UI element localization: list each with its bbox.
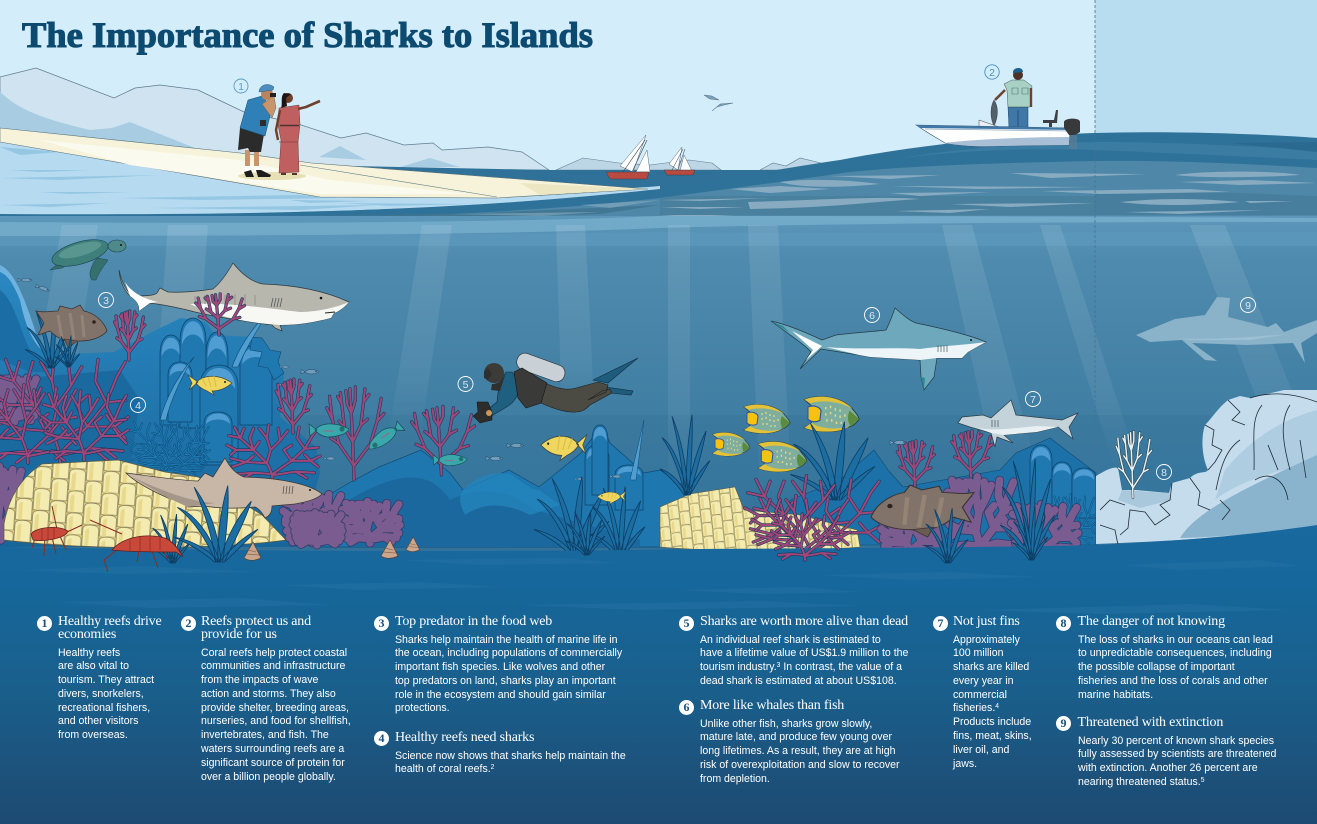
panel: item 3 text — [374, 614, 622, 714]
ghost shark silhouette — [1136, 297, 1317, 363]
body 3: important fish species. Like wolves and other — [395, 661, 605, 673]
purple coral far left — [0, 376, 37, 540]
number label 8: 8 — [1161, 467, 1167, 479]
sailboat one — [606, 135, 650, 179]
badge 7: 7 — [938, 616, 944, 630]
body 9: with extinction. Another 26 percent are — [1078, 762, 1257, 774]
body 5: dead shark is estimated at about US$108. — [700, 675, 897, 687]
heading 7: Not just fins — [953, 614, 1020, 628]
heading 1: Healthy reefs drive — [58, 614, 161, 628]
number label 3: 3 — [103, 295, 109, 307]
heading 5: Sharks are worth more alive than dead — [700, 614, 908, 628]
blue tube coral centre — [585, 425, 643, 510]
panel: item 1 text — [37, 614, 162, 741]
badge 2: 2 — [186, 616, 192, 630]
body 6: long lifetimes. As a result, they are at high — [700, 745, 895, 757]
number label 9: 9 — [1245, 300, 1251, 312]
fisherman on boat — [916, 68, 1080, 149]
body 2: waters surrounding reefs are a — [201, 743, 344, 755]
heading 3: Top predator in the food web — [395, 614, 552, 628]
diver hood and mask — [484, 363, 504, 383]
fisherman — [991, 68, 1032, 128]
light rays — [30, 225, 1317, 500]
blue tube coral right — [1030, 445, 1096, 518]
boat hull — [916, 125, 1071, 146]
scuba diver — [473, 351, 638, 423]
nurse shark — [126, 458, 322, 518]
badge 6 — [679, 700, 694, 714]
number label 8 — [1156, 464, 1172, 480]
body 8: The loss of sharks in our oceans can lead — [1078, 634, 1272, 646]
light top strip under surface — [0, 216, 1317, 236]
body 2: Coral reefs help protect coastal — [201, 646, 347, 658]
body 3 — [395, 634, 622, 714]
title: The Importance of Sharks to Islands — [22, 15, 593, 55]
sea floor and text background — [0, 525, 1317, 824]
body 7: fisheries.4 — [953, 702, 999, 714]
seagulls — [704, 95, 733, 111]
number label 2 — [985, 65, 999, 79]
heading 8: The danger of not knowing — [1078, 614, 1225, 628]
body 1: tourism. They attract — [58, 674, 154, 686]
body 8: fisheries and the loss of corals and other — [1078, 675, 1267, 687]
badge 4 — [374, 730, 389, 746]
back reef mass left — [0, 265, 320, 547]
body 2: from the impacts of wave — [201, 674, 318, 686]
badge 6: 6 — [684, 700, 690, 714]
number label 2: 2 — [989, 67, 995, 79]
number label 4: 4 — [135, 400, 141, 412]
grouper one — [36, 305, 107, 347]
outboard motor — [1064, 119, 1080, 135]
body 2: provide shelter, breeding areas, — [201, 702, 349, 714]
purple coral right — [881, 477, 1078, 556]
lobed coral edge — [250, 337, 284, 380]
body 6 — [700, 718, 900, 785]
number label 5: 5 — [463, 379, 469, 391]
wave bands — [900, 142, 1317, 160]
body 9 — [1078, 734, 1276, 788]
tourist and local woman on beach — [238, 85, 320, 180]
body 3: Sharks help maintain the health of marine life in — [395, 634, 617, 646]
dark reef shade behind left corals — [0, 370, 140, 470]
boat seat — [1043, 110, 1058, 127]
body 7: commercial — [953, 689, 1007, 701]
number label 6: 6 — [869, 310, 875, 322]
body 2: invertebrates, and fish. The — [201, 729, 329, 741]
heading 1: economies — [58, 626, 116, 642]
badge 2 — [181, 616, 196, 630]
badge 5 — [679, 616, 694, 630]
body 7: 100 million — [953, 647, 1003, 659]
body 7: liver oil, and — [953, 744, 1009, 756]
badge 8 — [1056, 616, 1071, 630]
local woman — [276, 93, 320, 175]
underwater water body — [0, 216, 1317, 556]
yellow fish one — [188, 375, 232, 395]
reef left bulge highlight — [0, 265, 50, 355]
number label 4 — [130, 398, 146, 412]
yellow boulder coral right — [660, 487, 860, 551]
body 8: the possible collapse of important — [1078, 661, 1234, 673]
sea turtle — [49, 234, 126, 280]
body 5 — [700, 634, 908, 687]
badge 1 — [37, 616, 52, 630]
heading 2: Reefs protect us and — [201, 614, 311, 628]
boat windshield — [979, 120, 999, 127]
dark sea patches — [300, 190, 1317, 219]
body 4: Science now shows that sharks help maintain the — [395, 750, 626, 762]
number label 9 — [1240, 298, 1256, 312]
sea grass under grouper — [55, 336, 80, 367]
body 2 — [201, 646, 351, 783]
reef shark — [771, 308, 986, 390]
body 7 — [952, 634, 1032, 770]
background: sky — [0, 0, 1317, 230]
number label 1 — [234, 79, 248, 93]
body 6: risk of overexploitation and slow to recover — [700, 759, 900, 771]
body 2: over a billion people globally. — [201, 771, 336, 783]
body 3: role in the ecosystem and should gain similar — [395, 689, 606, 701]
body 8: marine habitats. — [1078, 689, 1153, 701]
cone shells on sea floor — [244, 537, 420, 560]
hammerhead shark — [958, 400, 1078, 447]
body 7: fins, meat, skins, — [953, 730, 1032, 742]
fine blue branching coral — [128, 420, 1095, 545]
heading 2 — [201, 614, 311, 642]
badge 9: 9 — [1060, 716, 1066, 730]
body 7: Products include — [953, 716, 1031, 728]
diver vest — [514, 368, 547, 408]
body 1 — [58, 646, 154, 741]
number label 6 — [864, 308, 880, 322]
body 9: Nearly 30 percent of known shark species — [1078, 734, 1274, 746]
sea grass near grouper — [25, 311, 73, 368]
body 3: protections. — [395, 702, 450, 714]
yellow boulder coral left — [4, 460, 286, 548]
angelfish group — [713, 397, 859, 472]
body 6: Unlike other fish, sharks grow slowly, — [700, 718, 872, 730]
body 2: significant source of protein for — [201, 757, 345, 769]
yellow fish three — [597, 491, 626, 504]
heading 4: Healthy reefs need sharks — [395, 730, 534, 744]
number label 5 — [458, 376, 473, 392]
body 1: from overseas. — [58, 729, 128, 741]
body 9: fully assessed by scientists are threatened — [1078, 748, 1276, 760]
blue tube coral left — [160, 318, 272, 465]
red whip coral — [115, 311, 145, 360]
lobster two — [90, 520, 183, 572]
badge 9 — [1056, 716, 1071, 730]
diver air tank — [514, 351, 567, 384]
body 8: to unpredictable consequences, including — [1078, 647, 1271, 659]
body 7: jaws. — [953, 758, 977, 770]
sailboat two — [664, 147, 695, 175]
body 4 — [395, 750, 626, 775]
diver legs — [541, 382, 612, 412]
body 2: communities and infrastructure — [201, 660, 345, 672]
number label 7: 7 — [1030, 394, 1036, 406]
panel: item 6 text — [679, 698, 900, 785]
main sea surface — [0, 132, 1317, 240]
tourist — [238, 85, 276, 177]
badge 7 — [933, 616, 948, 630]
heading 6: More like whales than fish — [700, 698, 844, 712]
number label 7 — [1026, 392, 1040, 406]
badge 8: 8 — [1060, 616, 1066, 630]
body 3: top predators on land, sharks play an important — [395, 675, 616, 687]
panel: item 7 text — [933, 614, 1032, 770]
badge 5: 5 — [684, 616, 690, 630]
panel: item 8 text — [1056, 614, 1272, 701]
beach sand bar — [0, 128, 648, 198]
body 7: every year in — [953, 675, 1013, 687]
far sea band — [300, 165, 830, 215]
sea grass centre — [534, 477, 645, 557]
tall sea blades on reef — [160, 310, 270, 420]
body 3: the ocean, including populations of commercially — [395, 647, 622, 659]
sea surface light streaks — [450, 172, 1317, 217]
number label 1: 1 — [238, 81, 244, 93]
heading 9: Threatened with extinction — [1078, 714, 1223, 730]
parrotfish group — [309, 420, 467, 466]
number label 3 — [98, 292, 114, 308]
shallow sea ripples — [0, 147, 470, 210]
sea whip left of yellow coral — [660, 415, 710, 495]
diver camera — [473, 402, 492, 423]
body 6: mature late, and produce few young over — [700, 731, 892, 743]
red coral on tiger shark — [196, 294, 245, 335]
mid water tone change — [0, 415, 1317, 555]
body 1: are also vital to — [58, 660, 129, 672]
red fans centre-left — [227, 379, 474, 480]
diver arms and chest — [487, 372, 518, 417]
body 1: Healthy reefs — [58, 646, 120, 658]
badge 3 — [374, 616, 389, 630]
red whips right — [897, 431, 992, 488]
red sea fan large left — [0, 355, 128, 465]
sea floor ripples — [20, 558, 1300, 614]
back reef mound centre — [320, 425, 700, 547]
body 7: Approximately — [953, 634, 1020, 646]
body 5: have a lifetime value of US$1.9 million to the — [700, 647, 908, 659]
panel: item 9 text — [1056, 714, 1276, 788]
body 1: divers, snorkelers, — [58, 688, 144, 700]
bleached coral cracks — [1100, 394, 1317, 545]
body 5: tourism industry.3 In contrast, the value of a — [700, 661, 902, 673]
background: distant mountains — [0, 68, 830, 170]
small fish group — [18, 278, 975, 480]
body 4: health of coral reefs.2 — [395, 763, 494, 775]
dashed divider — [1094, 0, 1096, 546]
sea grass behind big fan — [790, 422, 875, 500]
sea grass right — [1000, 459, 1055, 557]
panel: item 5 text — [679, 614, 908, 687]
light shallow sea left — [0, 135, 660, 214]
lobster one — [31, 506, 82, 556]
back reef right — [790, 438, 1096, 545]
heading 1 — [58, 614, 162, 642]
yellow fish two — [541, 435, 587, 461]
body 2: nurseries, and food for shellfish, — [201, 715, 351, 727]
panel: item 2 text — [181, 614, 351, 783]
bleached whip coral — [1116, 431, 1151, 498]
diver fins — [593, 358, 638, 395]
tiger shark — [119, 263, 349, 331]
foreground sea grass and fans over sea floor — [151, 486, 1048, 563]
purple coral centre-left — [283, 492, 400, 545]
body 6: from depletion. — [700, 773, 770, 785]
panel: item 4 text — [374, 730, 626, 775]
red fan big right — [745, 476, 882, 563]
grouper two — [871, 485, 974, 537]
body 1: and other visitors — [58, 715, 138, 727]
badge 3: 3 — [378, 616, 384, 630]
bleached dead reef — [1096, 390, 1317, 545]
body 2: action and storms. They also — [201, 688, 336, 700]
body 7: sharks are killed — [953, 661, 1029, 673]
heading 2: provide for us — [201, 626, 277, 642]
mid sea tone — [0, 161, 1317, 240]
body 9: nearing threatened status.5 — [1078, 776, 1204, 788]
body 5: An individual reef shark is estimated to — [700, 634, 881, 646]
badge 1: 1 — [42, 616, 48, 630]
body 1: recreational fishers, — [58, 702, 150, 714]
badge 4: 4 — [378, 730, 384, 744]
body 8 — [1078, 634, 1272, 701]
